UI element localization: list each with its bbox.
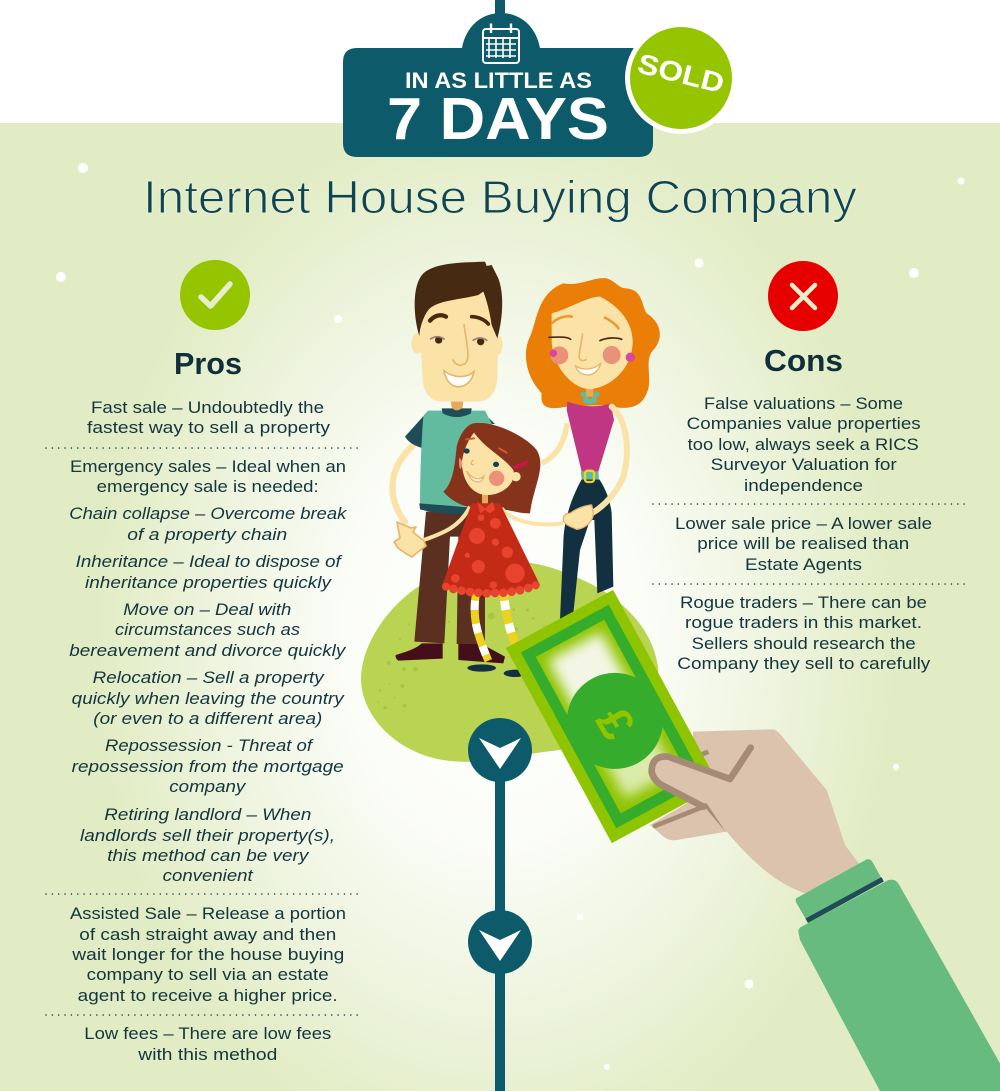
text: assisted sale: agent to receive a higher price. — [78, 986, 338, 1005]
text: fast sale: Fast sale – Undoubtedly the — [91, 398, 324, 417]
text: repossession: company — [169, 777, 247, 796]
header badge: in as little as 7 days — [343, 0, 653, 157]
clasped hand: woman and girl — [563, 505, 593, 529]
icon: cross — [768, 261, 838, 331]
text: false valuations: independence — [744, 476, 863, 495]
text: assisted sale: wait longer for the house buying — [71, 945, 344, 964]
text: chain collapse: of a property chain — [127, 525, 287, 544]
decorative white dots — [56, 163, 964, 1070]
thumb, cuff and sleeve — [652, 748, 1000, 1091]
girl — [422, 423, 563, 677]
text: lower sale price: Estate Agents — [745, 555, 862, 574]
heading: cons: Cons — [764, 343, 843, 378]
text: low fees: Low fees – There are low fees — [84, 1024, 331, 1043]
text: relocation: (or even to a different area) — [93, 709, 322, 728]
badge text large: 7 DAYS — [387, 86, 609, 152]
text: move on — [69, 600, 347, 660]
text: relocation: quickly when leaving the country — [72, 689, 345, 708]
text: relocation — [72, 668, 345, 728]
icon: check — [180, 260, 250, 330]
text: assisted sale: company to sell via an estate — [87, 965, 329, 984]
text: repossession — [72, 736, 344, 796]
text: chain collapse — [69, 504, 348, 544]
text: retiring landlord — [80, 805, 335, 885]
text: repossession: repossession from the mortgage — [72, 757, 344, 776]
text: emergency sales: emergency sale is needed: — [97, 477, 319, 496]
timeline line — [495, 770, 505, 1091]
text: repossession: Repossession - Threat of — [105, 736, 314, 755]
hill behind family — [361, 561, 658, 762]
text: retiring landlord: landlords sell their property(s), — [80, 826, 335, 845]
text: false valuations: too low, always seek a RICS — [688, 435, 919, 454]
text: chain collapse: Chain collapse – Overcome break — [69, 504, 348, 523]
heading: pros: Pros — [174, 346, 242, 381]
text: false valuations: Companies value properties — [687, 414, 921, 433]
text: relocation: Relocation – Sell a property — [93, 668, 325, 687]
text: lower sale price: Lower sale price – A lower sale — [675, 514, 932, 533]
text: retiring landlord: Retiring landlord – When — [104, 805, 311, 824]
sold text: SOLD — [635, 48, 727, 99]
text: fast sale: fastest way to sell a property — [87, 418, 331, 437]
badge text small: IN AS LITTLE AS — [405, 68, 592, 93]
text: assisted sale — [70, 904, 346, 1005]
title: Internet House Buying Company — [143, 171, 857, 223]
text: inheritance: Inheritance – Ideal to dispose of — [76, 552, 343, 571]
clasped hand: man and girl — [394, 522, 426, 557]
text: move on: circumstances such as — [115, 620, 301, 639]
text: move on: bereavement and divorce quickly — [69, 641, 347, 660]
sold sticker — [625, 22, 737, 134]
panel: pros — [46, 260, 358, 1064]
icon: calendar — [483, 24, 519, 63]
text: false valuations: Surveyor Valuation for — [711, 455, 897, 474]
text: lower sale price: price will be realised than — [697, 534, 909, 553]
text: lower sale price — [675, 514, 932, 574]
illustration: hand holding banknote — [506, 590, 1000, 1091]
text: inheritance — [76, 552, 343, 592]
text: fast sale — [87, 398, 331, 437]
text: retiring landlord: convenient — [163, 866, 254, 885]
text: rogue traders: Company they sell to carefully — [677, 654, 931, 673]
illustration: family — [392, 262, 660, 677]
woman — [526, 278, 660, 620]
text: assisted sale: Assisted Sale – Release a portion — [70, 904, 346, 923]
text: emergency sales: Emergency sales – Ideal when an — [70, 457, 346, 476]
text: move on: Move on – Deal with — [123, 600, 291, 619]
text: rogue traders: Rogue traders – There can be — [680, 593, 927, 612]
timeline arrow 2 — [468, 910, 532, 974]
pound symbol: £ — [585, 699, 644, 749]
text: false valuations: False valuations – Some — [704, 394, 903, 413]
text: low fees: with this method — [137, 1045, 277, 1064]
panel: cons — [653, 261, 965, 673]
text: retiring landlord: this method can be very — [107, 846, 310, 865]
man — [392, 262, 505, 663]
banknote — [506, 590, 719, 843]
text: emergency sales — [70, 457, 346, 496]
text: low fees — [84, 1024, 331, 1064]
text: rogue traders — [677, 593, 931, 673]
text: inheritance: inheritance properties quickly — [85, 573, 333, 592]
text: false valuations — [687, 394, 921, 495]
text: assisted sale: of cash straight away and then — [79, 925, 336, 944]
timeline arrow 1 — [468, 718, 532, 782]
text: rogue traders: rogue traders in this market. — [685, 613, 922, 632]
hand back — [650, 729, 860, 893]
text: rogue traders: Sellers should research the — [692, 634, 916, 653]
